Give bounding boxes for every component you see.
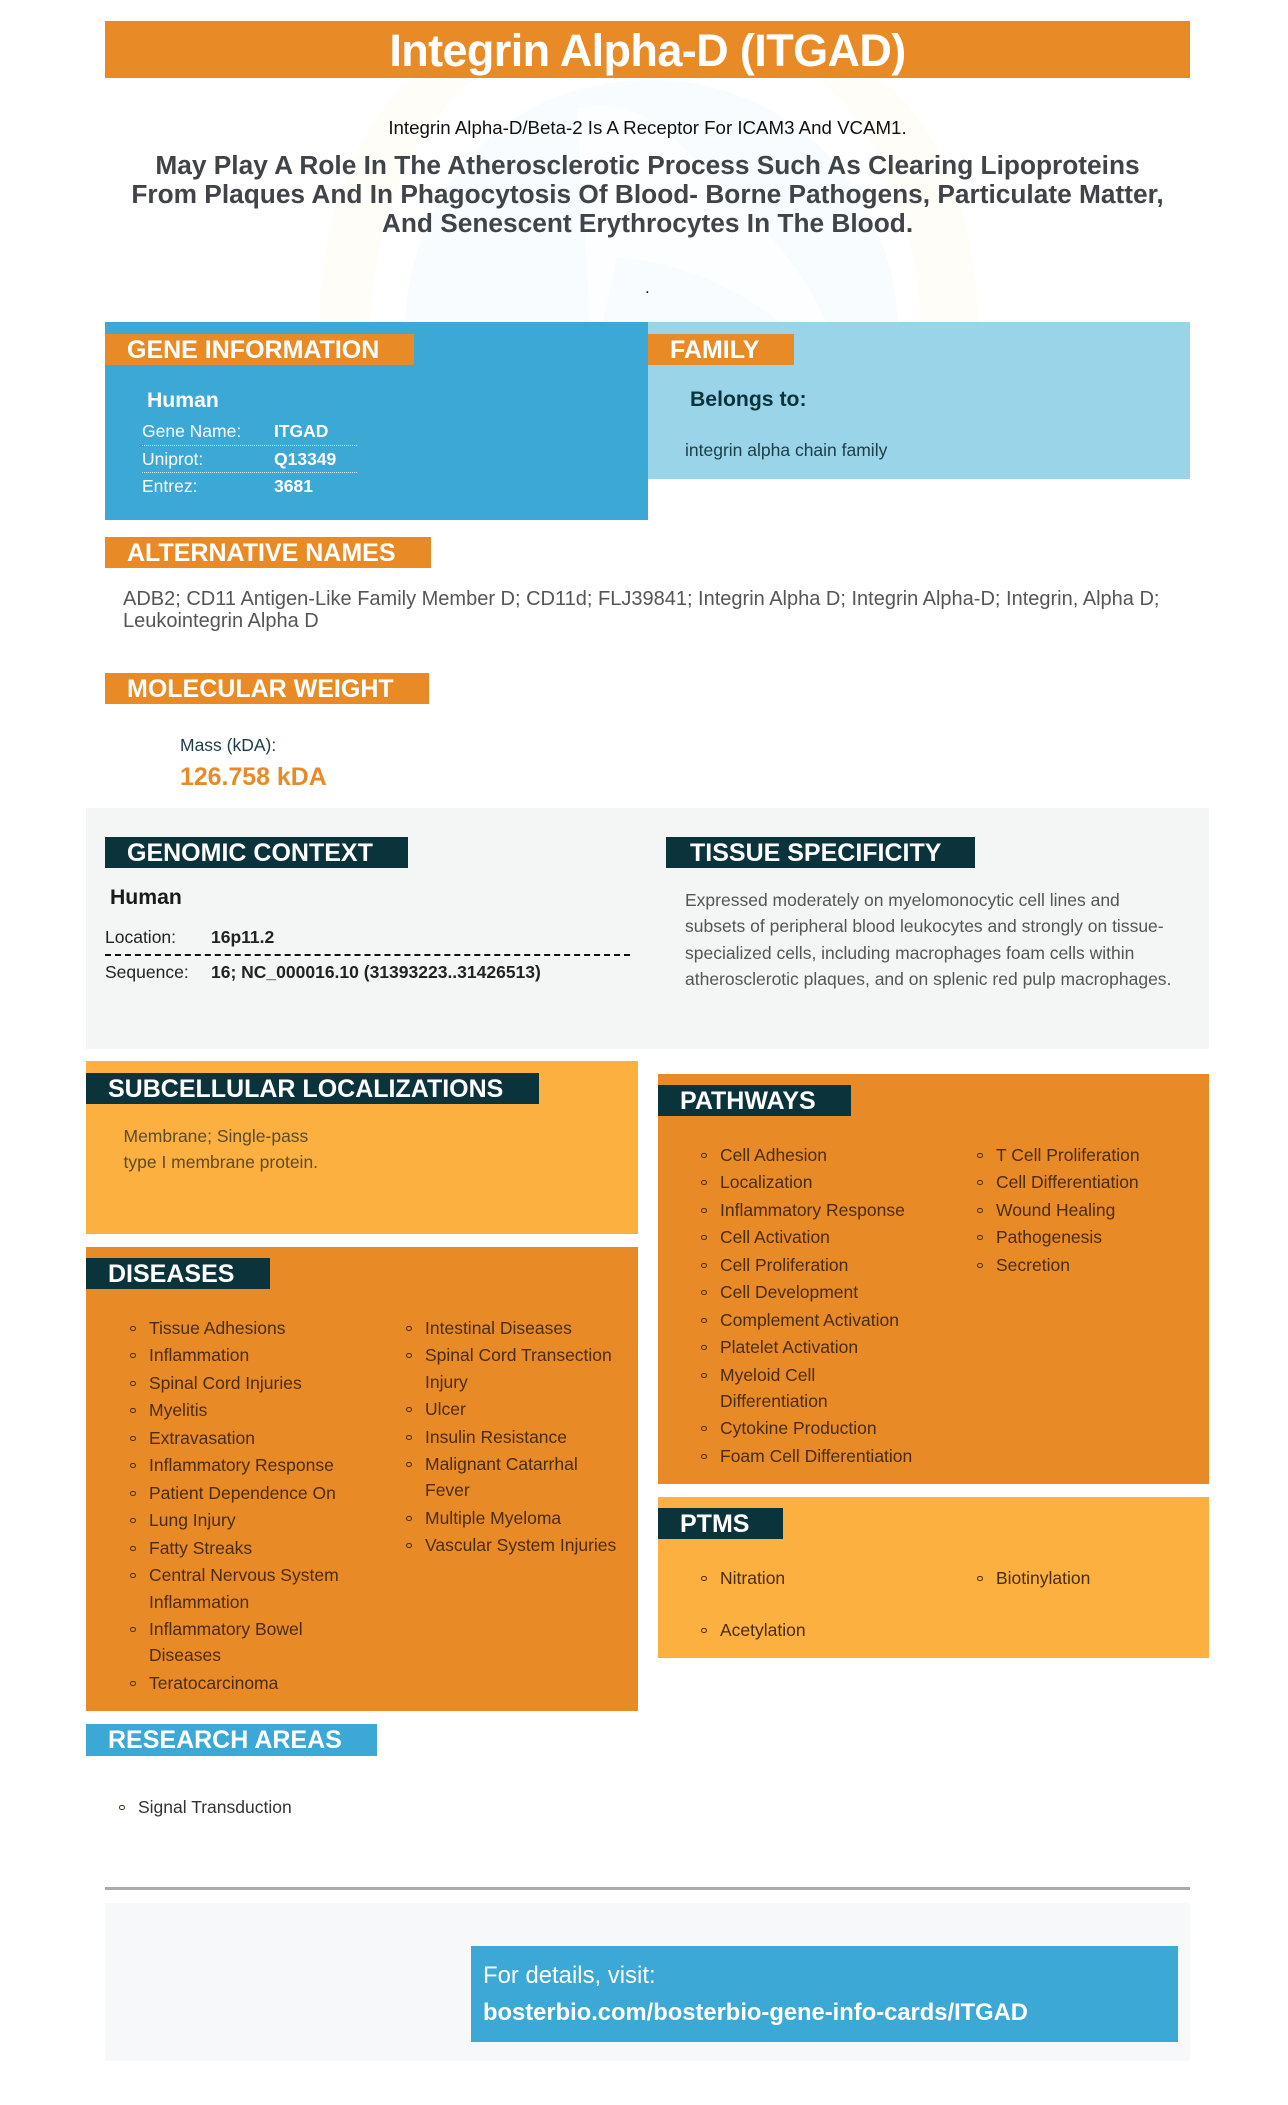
heading: family: FAMILY	[670, 336, 759, 364]
list: research areas: Signal Transduction	[138, 1797, 292, 1817]
list: diseases column 1: Myelitis	[149, 1400, 207, 1420]
list: pathways column 2: Wound Healing	[996, 1200, 1115, 1220]
list: pathways column 1: Cytokine Production	[720, 1418, 877, 1438]
tissue specificity text: atherosclerotic plaques, and on splenic red pulp macrophages.	[685, 969, 1171, 989]
gene details table: Entrez:	[142, 476, 197, 496]
list: diseases column 2	[406, 1318, 616, 1555]
list: diseases column 2: Injury	[425, 1372, 468, 1392]
list: pathways column 2	[977, 1145, 1140, 1275]
family value: integrin alpha chain family	[685, 440, 887, 460]
footer rule	[105, 1887, 1190, 1890]
tissue specificity text: specialized cells, including macrophages foam cells within	[685, 943, 1134, 963]
list: diseases column 1: Inflammation	[149, 1592, 249, 1612]
list: diseases column 1: Patient Dependence On	[149, 1483, 336, 1503]
list: diseases column 2: Ulcer	[425, 1399, 466, 1419]
heading: family	[648, 334, 794, 365]
panel: genomic context and tissue specificity	[86, 808, 1209, 1049]
gene details table: Gene Name:	[142, 421, 241, 441]
list: pathways column 2: Cell Differentiation	[996, 1172, 1139, 1192]
panel: family	[648, 322, 1190, 479]
mass label: Mass (kDA):	[180, 735, 276, 755]
list: diseases column 1: Inflammation	[149, 1345, 249, 1365]
list: pathways column 2: Secretion	[996, 1255, 1070, 1275]
stray dot: .	[645, 278, 650, 297]
list: pathways column 1	[701, 1145, 912, 1466]
list: PTMs: Nitration	[720, 1568, 785, 1588]
subtitle: Integrin Alpha-D/Beta-2 Is A Receptor For ICAM3 And VCAM1.	[388, 117, 907, 138]
localization text	[124, 1126, 318, 1172]
heading: PTMs	[658, 1508, 783, 1539]
gene details table: Uniprot:	[142, 449, 203, 469]
list: diseases column 2: Insulin Resistance	[425, 1427, 567, 1447]
list: PTMs: Biotinylation	[996, 1568, 1090, 1588]
panel: footer	[105, 1903, 1190, 2061]
callout text: For details, visit:	[483, 1962, 656, 1989]
heading: pathways	[658, 1085, 851, 1116]
list: pathways column 2: T Cell Proliferation	[996, 1145, 1140, 1165]
heading: gene information: GENE INFORMATION	[127, 336, 379, 364]
localization text: Membrane; Single-pass	[124, 1126, 308, 1146]
decorative watermark: faint arches	[0, 0, 1288, 330]
location row	[105, 927, 274, 947]
list: pathways column 1: Localization	[720, 1172, 812, 1192]
gene details table: 3681	[274, 476, 313, 496]
list: diseases column 2: Multiple Myeloma	[425, 1508, 561, 1528]
alternative names text: Leukointegrin Alpha D	[123, 610, 319, 632]
species label: Human	[110, 886, 182, 909]
heading: molecular weight: MOLECULAR WEIGHT	[127, 675, 394, 703]
location row: 16p11.2	[211, 927, 274, 947]
list: pathways column 1: Differentiation	[720, 1391, 828, 1411]
alternative names text	[123, 588, 1159, 632]
tissue specificity text: Expressed moderately on myelomonocytic cell lines and	[685, 890, 1120, 910]
gene details table: ITGAD	[274, 421, 328, 441]
function description	[131, 150, 1164, 238]
list: pathways column 1: Cell Development	[720, 1282, 858, 1302]
list: pathways column 1: Inflammatory Response	[720, 1200, 905, 1220]
location row: Location:	[105, 927, 176, 947]
title banner: Integrin Alpha-D (ITGAD)	[389, 25, 906, 76]
list: diseases column 1: Teratocarcinoma	[149, 1673, 278, 1693]
callout url: bosterbio.com/bosterbio-gene-info-cards/ITGAD	[483, 1999, 1028, 2026]
list: diseases column 2: Spinal Cord Transection	[425, 1345, 612, 1365]
list: pathways column 1: Cell Activation	[720, 1227, 830, 1247]
mass value: 126.758 kDA	[180, 763, 327, 791]
list: diseases column 1: Spinal Cord Injuries	[149, 1373, 302, 1393]
heading: tissue specificity: TISSUE SPECIFICITY	[690, 839, 941, 867]
sequence row: Sequence:	[105, 962, 189, 982]
function description: From Plaques And In Phagocytosis Of Blood- Borne Pathogens, Particulate Matter,	[131, 179, 1164, 209]
localization text: type I membrane protein.	[124, 1152, 318, 1172]
panel: PTMs	[658, 1497, 1209, 1658]
list: diseases column 1: Inflammatory Response	[149, 1455, 334, 1475]
heading: research areas: RESEARCH AREAS	[108, 1726, 342, 1754]
heading: alternative names: ALTERNATIVE NAMES	[127, 539, 396, 567]
gene details table	[142, 421, 357, 496]
function description: May Play A Role In The Atherosclerotic Process Such As Clearing Lipoproteins	[155, 150, 1140, 180]
panel: gene information	[105, 322, 648, 520]
tissue specificity text: subsets of peripheral blood leukocytes and strongly on tissue-	[685, 916, 1164, 936]
species label: Human	[147, 389, 219, 412]
panel: subcellular localizations	[86, 1061, 638, 1234]
gene details table: Q13349	[274, 449, 336, 469]
tissue specificity text	[685, 890, 1171, 989]
alternative names text: ADB2; CD11 Antigen-Like Family Member D; CD11d; FLJ39841; Integrin Alpha D; Integrin Alpha-D; Integrin, Alpha D;	[123, 588, 1159, 610]
list: diseases column 2: Intestinal Diseases	[425, 1318, 572, 1338]
list: pathways column 1: Complement Activation	[720, 1310, 899, 1330]
panel: pathways	[658, 1074, 1209, 1484]
panel: diseases	[86, 1247, 638, 1711]
list: diseases column 1: Lung Injury	[149, 1510, 236, 1530]
belongs to label: Belongs to:	[690, 388, 807, 411]
heading: subcellular localizations: SUBCELLULAR LOCALIZATIONS	[108, 1075, 503, 1103]
list: PTMs: Acetylation	[720, 1620, 806, 1640]
list: diseases column 2: Fever	[425, 1480, 470, 1500]
heading: genomic context: GENOMIC CONTEXT	[127, 839, 373, 867]
list: pathways column 1: Platelet Activation	[720, 1337, 858, 1357]
list: diseases column 1: Diseases	[149, 1645, 221, 1665]
list: diseases column 1: Fatty Streaks	[149, 1538, 252, 1558]
list: diseases column 1: Inflammatory Bowel	[149, 1619, 303, 1639]
heading: diseases: DISEASES	[108, 1260, 234, 1288]
list: diseases column 2: Malignant Catarrhal	[425, 1454, 578, 1474]
callout: details link	[471, 1946, 1178, 2042]
list: pathways column 1: Cell Proliferation	[720, 1255, 848, 1275]
heading: pathways: PATHWAYS	[680, 1087, 816, 1115]
list: diseases column 1: Extravasation	[149, 1428, 255, 1448]
list: pathways column 1: Myeloid Cell	[720, 1365, 815, 1385]
heading: PTMs: PTMS	[680, 1510, 749, 1538]
list: pathways column 1: Cell Adhesion	[720, 1145, 827, 1165]
list: diseases column 1: Central Nervous System	[149, 1565, 339, 1585]
heading: diseases	[86, 1258, 270, 1289]
list: pathways column 2: Pathogenesis	[996, 1227, 1102, 1247]
list: diseases column 1	[130, 1318, 339, 1693]
function description: And Senescent Erythrocytes In The Blood.	[382, 208, 913, 238]
sequence row: 16; NC_000016.10 (31393223..31426513)	[211, 962, 541, 982]
list: diseases column 1: Tissue Adhesions	[149, 1318, 286, 1338]
list: pathways column 1: Foam Cell Differentiation	[720, 1446, 912, 1466]
dashed divider	[105, 954, 630, 956]
list: PTMs	[701, 1568, 1090, 1640]
list: diseases column 2: Vascular System Injuries	[425, 1535, 616, 1555]
title banner	[105, 21, 1190, 78]
